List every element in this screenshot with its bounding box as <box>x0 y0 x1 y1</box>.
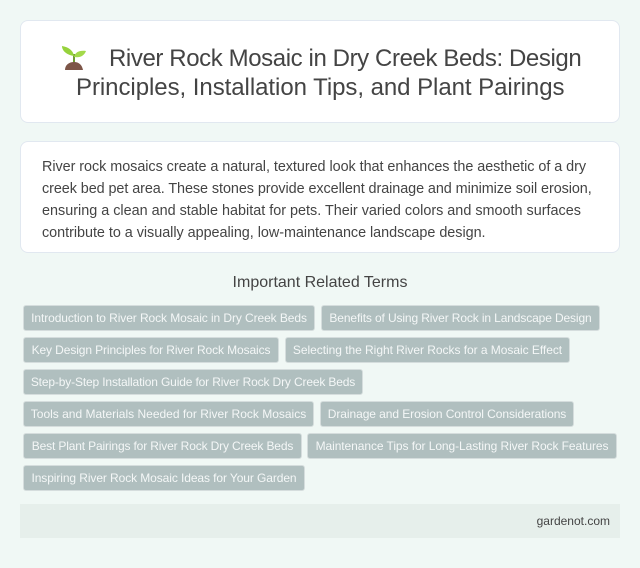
tag: Best Plant Pairings for River Rock Dry Creek Beds <box>32 439 293 453</box>
description text: creek bed pet area. These stones provide excellent drainage and minimize soil erosion, <box>42 181 592 197</box>
tag: Tools and Materials Needed for River Rock Mosaics <box>31 407 306 421</box>
tag: Benefits of Using River Rock in Landscape Design <box>329 311 592 325</box>
footer source text: gardenot.com <box>537 514 610 528</box>
section heading: Important Related Terms <box>233 274 407 291</box>
tag <box>23 433 302 459</box>
tag <box>23 337 279 363</box>
icon: seedling <box>62 46 86 70</box>
tag list <box>23 305 617 491</box>
tag: Step-by-Step Installation Guide for River Rock Dry Creek Beds <box>31 375 355 389</box>
tag <box>285 337 570 363</box>
footer bar <box>20 504 620 538</box>
description text: contribute to a visually appealing, low-maintenance landscape design. <box>42 225 486 241</box>
tag <box>321 305 600 331</box>
tag <box>23 465 305 491</box>
tag: Drainage and Erosion Control Considerations <box>328 407 566 421</box>
description text <box>42 159 592 241</box>
description text: ensuring a clean and stable habitat for pets. Their varied colors and smooth surfaces <box>42 203 581 219</box>
tag: Inspiring River Rock Mosaic Ideas for Your Garden <box>31 471 297 485</box>
panel: title card <box>20 20 620 123</box>
tag: Selecting the Right River Rocks for a Mosaic Effect <box>293 343 562 357</box>
tag <box>320 401 574 427</box>
tag <box>23 305 315 331</box>
title line 1: River Rock Mosaic in Dry Creek Beds: Design <box>109 45 581 72</box>
tag <box>23 369 363 395</box>
tag: Introduction to River Rock Mosaic in Dry Creek Beds <box>31 311 307 325</box>
tag <box>23 401 314 427</box>
panel: description card <box>20 141 620 253</box>
description text: River rock mosaics create a natural, textured look that enhances the aesthetic of a dry <box>42 159 586 175</box>
tag: Maintenance Tips for Long-Lasting River Rock Features <box>316 439 608 453</box>
title line 2: Principles, Installation Tips, and Plant Pairings <box>76 74 564 101</box>
tag: Key Design Principles for River Rock Mosaics <box>32 343 270 357</box>
tag <box>307 433 617 459</box>
